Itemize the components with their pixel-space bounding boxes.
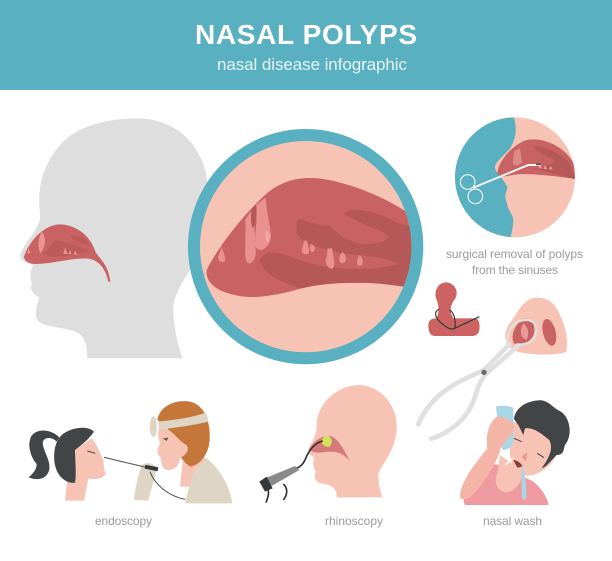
sinus <box>309 436 350 462</box>
woman with nasal wash <box>460 400 570 505</box>
title: NASAL POLYPS <box>195 19 417 50</box>
rhinoscopy scene <box>259 385 397 503</box>
head silhouette <box>20 118 209 358</box>
head <box>308 385 397 497</box>
circle ring <box>194 135 417 358</box>
endoscope <box>104 457 185 499</box>
green polyp <box>322 435 332 447</box>
forceps <box>418 320 536 439</box>
caption: endoscopy: endoscopy <box>95 514 152 528</box>
small sinus <box>24 224 110 282</box>
enlarged sinus cavity <box>207 178 418 297</box>
grey head profile with sinus <box>20 118 209 358</box>
caption: rhinoscopy: rhinoscopy <box>325 514 383 528</box>
caption: from the sinuses: from the sinuses <box>472 263 558 277</box>
rhinoscope <box>259 441 323 503</box>
scissors instrument <box>460 164 541 204</box>
doctor <box>134 401 232 503</box>
polyps <box>218 197 363 269</box>
patient <box>29 428 106 501</box>
subtitle: nasal disease infographic <box>217 55 408 74</box>
nose and forceps with polyp <box>418 282 570 505</box>
nose underside <box>505 298 567 355</box>
large magnified sinus circle <box>194 135 418 358</box>
caption: nasal wash: nasal wash <box>483 514 542 528</box>
endoscopy scene <box>29 401 232 503</box>
header banner <box>0 0 612 90</box>
peach and teal disc <box>453 115 577 238</box>
surgical removal circle <box>453 115 577 238</box>
caption: surgical removal: surgical removal of polyps <box>446 247 583 261</box>
removed polyp specimen <box>428 282 480 336</box>
sinus <box>497 139 577 179</box>
